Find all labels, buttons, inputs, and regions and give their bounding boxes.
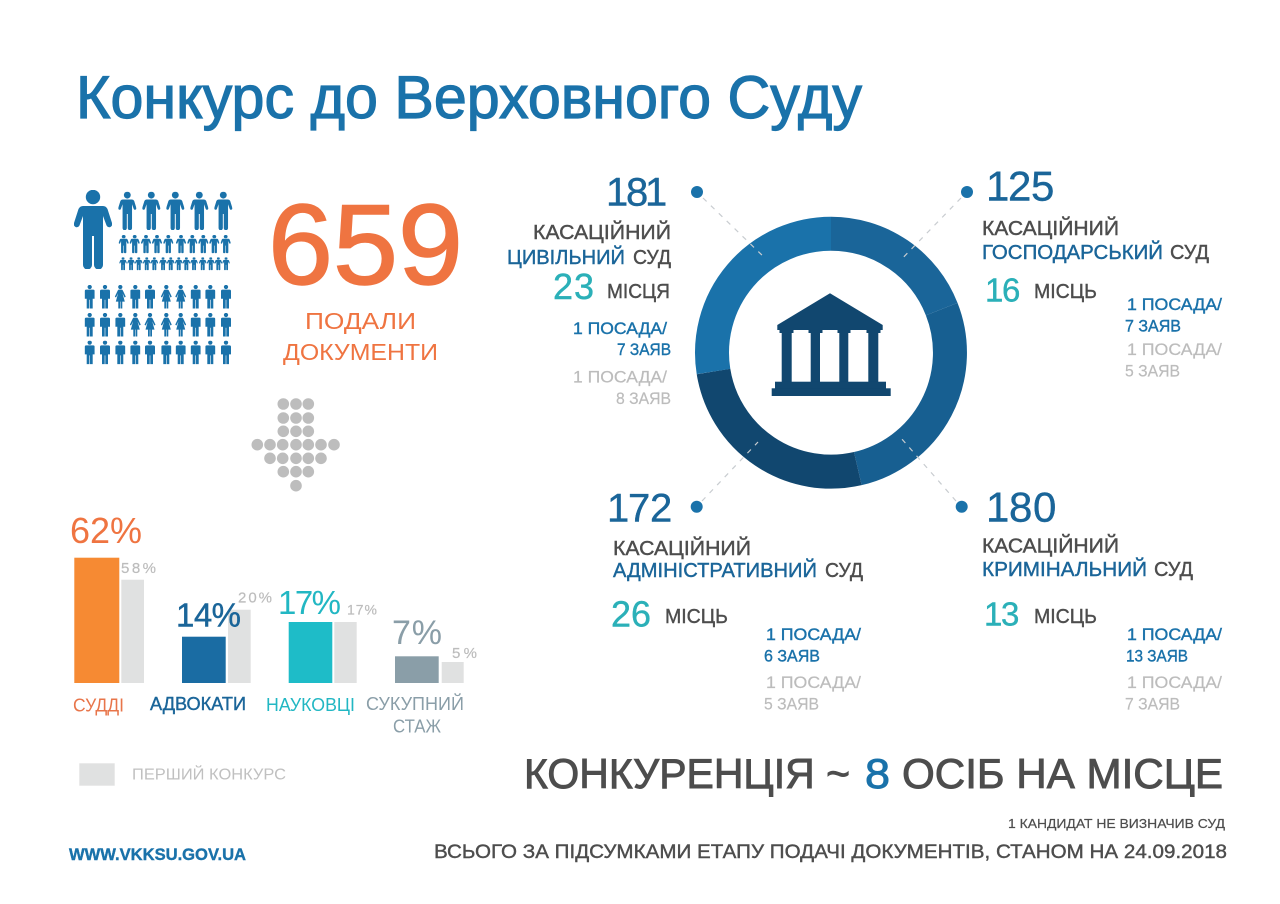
- bar group: scholars: 17%: [278, 584, 341, 621]
- panel: criminal court: КАСАЦІЙНИЙ: [982, 534, 1119, 558]
- bar group: combined experience: 7%: [392, 614, 442, 652]
- panel: civil court: СУД: [633, 247, 671, 269]
- summary line: ВСЬОГО ЗА ПІДСУМКАМИ ЕТАПУ ПОДАЧІ ДОКУМЕНТІВ, СТАНОМ НА 24.09.2018: [434, 842, 1227, 863]
- icon: court building: [772, 293, 891, 396]
- icon: dotted down arrow: [251, 398, 340, 492]
- panel: commercial court: ГОСПОДАРСЬКИЙ: [982, 240, 1163, 264]
- bar group: lawyers: АДВОКАТИ: [150, 694, 246, 714]
- bar group: combined experience: [366, 614, 477, 737]
- panel: administrative court: 26: [611, 594, 651, 635]
- panel: commercial court: 7 ЗАЯВ: [1125, 317, 1181, 336]
- bar group: combined experience: 5%: [452, 645, 477, 662]
- headline: competition ratio: КОНКУРЕНЦІЯ ~: [524, 750, 850, 797]
- panel: civil court: МІСЦЯ: [607, 281, 670, 303]
- panel: civil court: 1 ПОСАДА/: [573, 368, 667, 387]
- website: WWW.VKKSU.GOV.UA: [69, 845, 246, 864]
- panel: civil court: 8 ЗАЯВ: [616, 389, 671, 408]
- panel: criminal court: 1 ПОСАДА/: [1127, 625, 1222, 644]
- footnote: 1 КАНДИДАТ НЕ ВИЗНАЧИВ СУД: [1008, 816, 1225, 831]
- panel: administrative court: КАСАЦІЙНИЙ: [613, 536, 751, 560]
- bar group: judges: СУДДІ: [73, 696, 124, 716]
- panel: civil court: 23: [553, 266, 594, 307]
- panel: commercial court: МІСЦЬ: [1034, 281, 1097, 303]
- donut chart: applicants by court: [712, 234, 950, 472]
- bar group: lawyers: [150, 590, 272, 714]
- bar group: lawyers: 20%: [238, 590, 272, 607]
- bar group: judges: 58%: [121, 560, 156, 577]
- headline: competition ratio: ОСІБ НА МІСЦЕ: [902, 750, 1223, 797]
- panel: civil court: 1 ПОСАДА/: [573, 319, 667, 338]
- panel: civil court: 181: [606, 171, 667, 215]
- panel: civil court: 7 ЗАЯВ: [617, 340, 671, 359]
- panel: commercial court: 1 ПОСАДА/: [1127, 340, 1222, 359]
- panel: civil court: [507, 171, 703, 408]
- bar group: scholars: НАУКОВЦІ: [266, 695, 355, 715]
- headline: competition ratio: [524, 750, 1223, 797]
- panel: criminal court: 1 ПОСАДА/: [1127, 673, 1222, 692]
- bar group: combined experience: СУКУПНИЙ: [366, 693, 464, 714]
- icon: crowd of people: [74, 190, 232, 364]
- panel: administrative court: СУД: [825, 560, 863, 582]
- headline: competition ratio: 8: [865, 750, 890, 797]
- panel: commercial court: СУД: [1170, 242, 1209, 264]
- panel: criminal court: КРИМІНАЛЬНИЙ: [982, 557, 1147, 581]
- panel: administrative court: 1 ПОСАДА/: [766, 625, 861, 644]
- panel: administrative court: МІСЦЬ: [665, 606, 728, 628]
- panel: criminal court: МІСЦЬ: [1034, 606, 1097, 628]
- bar chart: applicants by profession: [70, 510, 477, 737]
- panel: commercial court: 1 ПОСАДА/: [1127, 295, 1222, 314]
- panel: administrative court: [607, 487, 863, 714]
- panel: commercial court: 5 ЗАЯВ: [1125, 362, 1180, 381]
- bar group: judges: [70, 510, 156, 716]
- panel: criminal court: 13: [984, 596, 1019, 633]
- panel: commercial court: 16: [985, 272, 1020, 309]
- total applicants: 659: [268, 182, 463, 365]
- panel: administrative court: АДМІНІСТРАТИВНИЙ: [613, 558, 817, 582]
- panel: criminal court: 13 ЗАЯВ: [1126, 647, 1188, 666]
- total applicants: 659: ДОКУМЕНТИ: [283, 339, 438, 365]
- panel: civil court: КАСАЦІЙНИЙ: [533, 220, 671, 244]
- panel: criminal court: СУД: [1154, 559, 1193, 581]
- panel: commercial court: 125: [986, 163, 1054, 210]
- bar group: lawyers: 14%: [176, 597, 241, 634]
- panel: criminal court: 7 ЗАЯВ: [1125, 695, 1180, 714]
- panel: criminal court: [956, 484, 1222, 714]
- panel: administrative court: 1 ПОСАДА/: [766, 673, 861, 692]
- panel: criminal court: 180: [986, 484, 1056, 531]
- bar group: combined experience: СТАЖ: [393, 717, 441, 737]
- panel: administrative court: 172: [607, 487, 672, 531]
- panel: commercial court: [961, 163, 1222, 381]
- total applicants: 659: 659: [268, 182, 463, 309]
- panel: administrative court: 5 ЗАЯВ: [764, 695, 819, 714]
- legend: first competition: ПЕРШИЙ КОНКУРС: [132, 766, 286, 784]
- panel: administrative court: 6 ЗАЯВ: [764, 647, 820, 666]
- title: Конкурс до Верховного Суду: [76, 64, 862, 131]
- panel: commercial court: КАСАЦІЙНИЙ: [982, 216, 1119, 240]
- bar group: scholars: 17%: [347, 601, 377, 617]
- legend: first competition: [79, 763, 286, 786]
- bar group: scholars: [266, 584, 377, 715]
- total applicants: 659: ПОДАЛИ: [305, 308, 416, 334]
- panel: civil court: ЦИВІЛЬНИЙ: [507, 245, 625, 269]
- bar group: judges: 62%: [70, 510, 142, 551]
- connector lines: [702, 198, 961, 501]
